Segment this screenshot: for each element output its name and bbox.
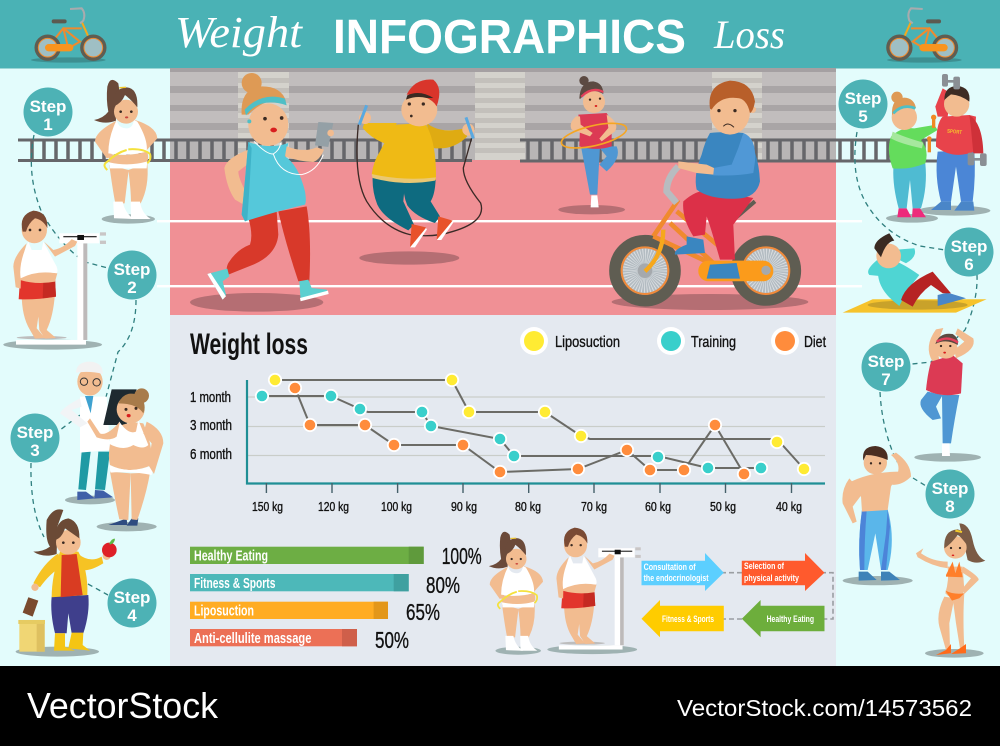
- footer image url: VectorStock.com/14573562: [677, 695, 972, 721]
- icon: junk food: [23, 597, 38, 617]
- arrow: fitness and sports: Fitness & Sports: [662, 614, 714, 625]
- badge: Step 2: [108, 250, 156, 300]
- legend: Liposuction: [555, 334, 620, 351]
- legend: Diet: [804, 334, 826, 351]
- y axis labels: 3 month: [190, 417, 232, 434]
- badge: Step 7: [862, 342, 910, 392]
- legend: Training: [691, 334, 736, 351]
- characters: couple with dumbbells: [886, 74, 990, 223]
- badge: Step 1: 1: [43, 115, 53, 134]
- series: training: [256, 390, 767, 474]
- y axis labels: 6 month: [190, 446, 232, 463]
- title: Weight: Weight: [175, 8, 304, 57]
- x axis labels: 150 kg: [252, 499, 283, 514]
- bar: Healthy Eating 100%: [190, 543, 482, 569]
- x axis labels: 80 kg: [515, 499, 541, 514]
- bar: Liposuction 65%: [190, 599, 440, 625]
- line chart: [190, 374, 825, 514]
- y axis labels: [190, 389, 232, 463]
- icon: apple: [102, 539, 117, 557]
- bar: Healthy Eating 100%: Healthy Eating: [194, 548, 268, 564]
- series: diet: [289, 382, 750, 480]
- header band: [0, 0, 1000, 69]
- badge: Step 7: Step: [868, 352, 904, 371]
- footer brand: VectorStock: [27, 685, 219, 726]
- arrow: selection of physical activity: physical activity: [744, 573, 800, 584]
- badge: Step 3: 3: [30, 441, 40, 460]
- series: liposuction: [269, 374, 810, 475]
- character: woman with hula hoop: [558, 76, 629, 214]
- bar: Fitness & Sports 80%: [190, 572, 460, 598]
- x axis labels: 100 kg: [381, 499, 412, 514]
- badge: Step 6: 6: [964, 255, 974, 274]
- arrow: consultation of the endocrinologist: [642, 553, 724, 591]
- badge: Step 4: [108, 578, 156, 628]
- icon: header bicycle right: [887, 8, 962, 63]
- bar: Liposuction 65%: 65%: [406, 599, 440, 625]
- x axis labels: 120 kg: [318, 499, 349, 514]
- arrow: selection of physical activity: Selection of: [744, 561, 785, 572]
- badge: Step 7: 7: [881, 370, 891, 389]
- character: doctor: [60, 362, 137, 504]
- badge: Step 8: 8: [945, 497, 955, 516]
- character: fit man flexing: [842, 446, 913, 585]
- footer band: [0, 666, 1000, 746]
- flow of arrows: [642, 553, 833, 637]
- character: jogging woman: [190, 73, 334, 312]
- character: boy riding a bicycle: [612, 81, 808, 310]
- badge: Step 8: Step: [932, 479, 968, 498]
- icon: header bicycle left: [31, 8, 106, 63]
- arrow: healthy eating: [742, 600, 824, 637]
- fence left and centre: [18, 140, 472, 160]
- character: man on a scale, centre: [547, 528, 641, 654]
- badge: Step 5: [838, 80, 888, 128]
- character: woman measuring waist: [94, 80, 157, 224]
- character: woman measuring waist, centre: [489, 532, 543, 655]
- bar: Anti-cellulite massage 50%: Anti-cellulite massage: [194, 631, 311, 647]
- badge: Step 3: Step: [17, 423, 53, 442]
- bar: Healthy Eating 100%: 100%: [442, 543, 482, 569]
- arrow: fitness and sports: [642, 600, 724, 637]
- badge: Step 5: Step: [845, 89, 881, 108]
- y axis labels: 1 month: [190, 389, 231, 406]
- arrow: healthy eating: Healthy Eating: [767, 614, 814, 625]
- x axis labels: 90 kg: [451, 499, 477, 514]
- connector: dashed step path right: [855, 132, 977, 486]
- badge: Step 8: [926, 470, 974, 518]
- arrow: selection of physical activity: [742, 553, 824, 591]
- legend: [520, 327, 826, 355]
- panel: stadium scene: [157, 68, 862, 315]
- x axis labels: [252, 499, 802, 514]
- icon: dumbbells: [942, 74, 987, 166]
- character: slim woman in bikini: [916, 523, 985, 658]
- bar chart: methods: [190, 543, 482, 653]
- character: man doing sit-ups on mat: [843, 233, 987, 313]
- badge: Step 1: [24, 88, 72, 136]
- character: boy with jump rope: [357, 80, 482, 265]
- badge: Step 3: [10, 414, 60, 462]
- title: INFOGRAPHICS: INFOGRAPHICS: [333, 11, 686, 64]
- bar: Fitness & Sports 80%: Fitness & Sports: [194, 576, 275, 592]
- badge: Step 6: [944, 228, 994, 276]
- badge: Step 5: 5: [858, 107, 868, 126]
- badge: Step 2: 2: [127, 278, 137, 297]
- bar: Fitness & Sports 80%: 80%: [426, 572, 460, 598]
- badge: Step 6: Step: [951, 237, 987, 256]
- panel: chart and stats: [170, 315, 836, 666]
- badge: Step 4: Step: [114, 588, 150, 607]
- bar: Liposuction 65%: Liposuction: [194, 604, 254, 620]
- bar: Anti-cellulite massage 50%: [190, 627, 409, 653]
- connector: dashed step path left: [31, 135, 136, 595]
- arrow: consultation of the endocrinologist: the endocrinologist: [644, 573, 709, 584]
- bar: Anti-cellulite massage 50%: 50%: [375, 627, 409, 653]
- x axis labels: 50 kg: [710, 499, 736, 514]
- characters: couple with dumbbells: SPORT: [947, 129, 963, 136]
- x axis labels: 40 kg: [776, 499, 802, 514]
- fence right: [520, 140, 938, 161]
- character: patient woman: [87, 388, 163, 531]
- icon: trash can: [18, 620, 45, 652]
- x axis labels: 60 kg: [645, 499, 671, 514]
- character: man on a scale: [3, 211, 106, 350]
- heading: Weight loss: Weight loss: [190, 328, 308, 361]
- badge: Step 1: Step: [30, 97, 66, 116]
- badge: Step 2: Step: [114, 260, 150, 279]
- title: Loss: Loss: [713, 12, 785, 57]
- x axis labels: 70 kg: [581, 499, 607, 514]
- character: girl with apple and trash can: [16, 509, 117, 657]
- character: woman in tree pose: [914, 328, 981, 462]
- arrow: consultation of the endocrinologist: Consultation of: [644, 562, 696, 573]
- badge: Step 4: 4: [127, 606, 137, 625]
